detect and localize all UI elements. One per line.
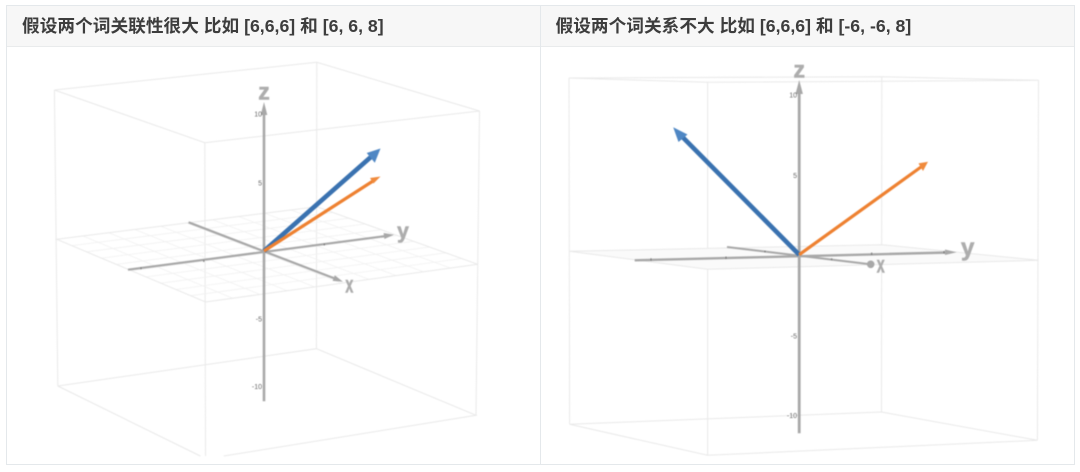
z axis: 5 xyxy=(793,172,797,180)
z axis: 5 xyxy=(258,180,262,187)
y axis xyxy=(634,234,975,261)
heading: left panel title: 假设两个词关联性很大 比如 [6,6,6] 和 [6, 6, 8] xyxy=(22,16,384,36)
x axis: x xyxy=(345,273,353,298)
xy plane grid xyxy=(56,206,477,302)
z axis: -5 xyxy=(255,316,262,323)
wireframe box xyxy=(568,76,1038,455)
z axis: z xyxy=(258,78,269,104)
panel: strongly related word vectors xyxy=(6,5,541,465)
y axis: y xyxy=(397,220,409,242)
z axis: z xyxy=(793,56,804,82)
z axis: 10 xyxy=(789,92,797,99)
vector: orange [6,6,6] xyxy=(264,176,380,250)
z axis: -5 xyxy=(790,333,797,340)
wireframe box xyxy=(54,62,479,456)
vector: blue [-6,-6,8] xyxy=(673,127,799,254)
xy plane xyxy=(569,244,1038,269)
x axis xyxy=(188,222,353,298)
heading: right panel title xyxy=(541,6,1074,47)
chart: 3D vectors, unrelated words xyxy=(568,56,1039,456)
x axis: x xyxy=(876,253,884,278)
panel: weakly related word vectors xyxy=(540,5,1074,465)
z axis: 10 xyxy=(254,111,262,118)
heading: left panel title xyxy=(7,6,540,47)
y axis xyxy=(128,220,409,269)
chart: 3D vectors, related words xyxy=(54,62,480,456)
heading: right panel title: 假设两个词关系不大 比如 [6,6,6] 和 [-6, -6, 8] xyxy=(556,16,911,36)
z axis: -10 xyxy=(786,412,797,420)
vector: orange [6,6,6] xyxy=(799,161,928,254)
z axis xyxy=(251,78,269,401)
z axis: -10 xyxy=(251,384,262,390)
x axis xyxy=(726,246,884,278)
z axis xyxy=(786,56,804,433)
vector: blue [6,6,8] xyxy=(264,148,380,250)
y axis: y xyxy=(961,234,975,261)
